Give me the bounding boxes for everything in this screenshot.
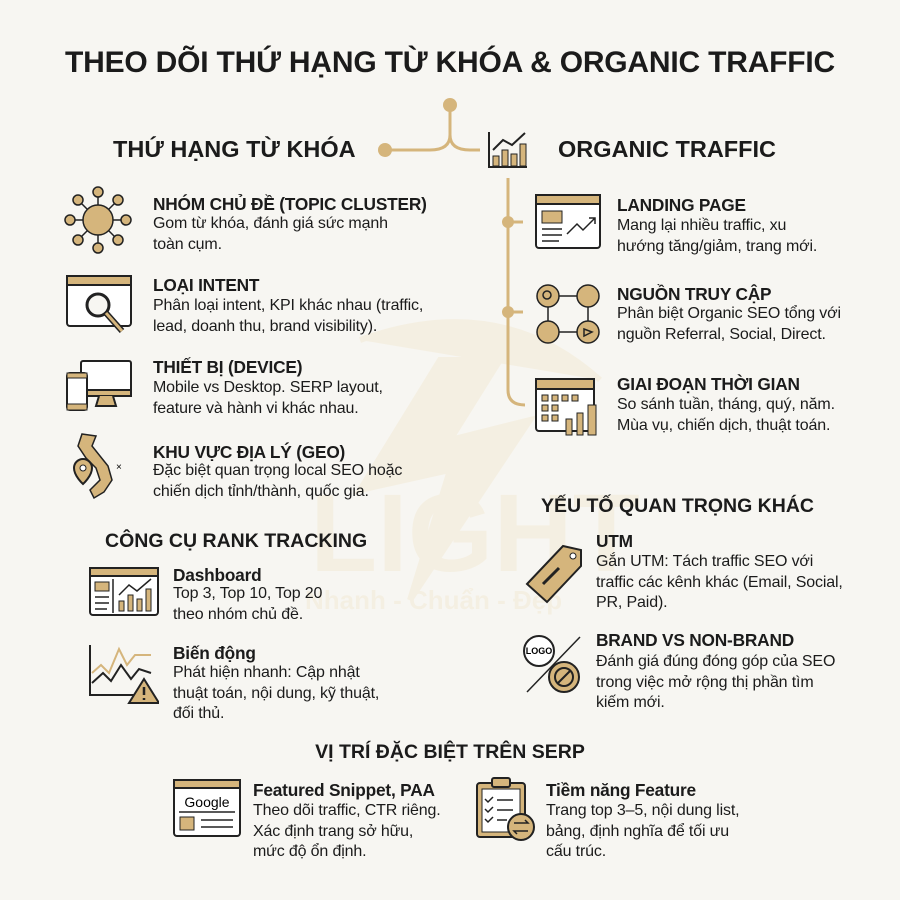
heading: rank tracking tools: CÔNG CỤ RANK TRACKING — [105, 530, 367, 552]
item: time periods: Mùa vụ, chiến dịch, thuật toán. — [617, 417, 830, 434]
item: brand vs non-brand: LOGO — [526, 646, 552, 656]
item: fluctuation: đối thủ. — [173, 705, 224, 722]
item: brand vs non-brand: BRAND VS NON-BRAND — [596, 630, 794, 650]
item: time periods — [535, 374, 835, 436]
watermark — [305, 319, 640, 615]
item: device — [66, 357, 383, 417]
item: UTM — [526, 531, 843, 611]
item: intent — [66, 275, 423, 335]
item: time periods: GIAI ĐOẠN THỜI GIAN — [617, 374, 800, 394]
item: featured snippet: Featured Snippet, PAA — [253, 780, 435, 800]
item: traffic sources: nguồn Referral, Social, Direct. — [617, 326, 826, 343]
heading: keyword ranking: THỨ HẠNG TỪ KHÓA — [113, 136, 356, 162]
item: geo: chiến dịch tỉnh/thành, quốc gia. — [153, 483, 369, 500]
item: topic cluster: Gom từ khóa, đánh giá sức mạnh — [153, 215, 388, 232]
item: geo — [73, 433, 402, 500]
item: featured snippet: mức độ ổn định. — [253, 843, 366, 860]
item: intent: LOẠI INTENT — [153, 275, 259, 295]
connector — [378, 98, 525, 406]
item: traffic sources: NGUỒN TRUY CẬP — [617, 284, 771, 304]
item: dashboard: theo nhóm chủ đề. — [173, 606, 303, 623]
item: feature potential: bảng, định nghĩa để tối ưu — [546, 823, 729, 840]
item: UTM: Gắn UTM: Tách traffic SEO với — [596, 553, 813, 570]
item: time periods: So sánh tuần, tháng, quý, năm. — [617, 396, 835, 413]
item: topic cluster: NHÓM CHỦ ĐỀ (TOPIC CLUSTER) — [153, 194, 427, 214]
item: landing page — [535, 194, 817, 255]
item: fluctuation: Phát hiện nhanh: Cập nhật — [173, 664, 360, 681]
item: geo: KHU VỰC ĐỊA LÝ (GEO) — [153, 442, 345, 462]
item: dashboard: Top 3, Top 10, Top 20 — [173, 585, 322, 602]
item: brand vs non-brand — [523, 630, 835, 711]
item: fluctuation: Biến động — [173, 643, 256, 663]
item: landing page: Mang lại nhiều traffic, xu — [617, 217, 786, 234]
item: featured snippet: Google — [184, 794, 230, 810]
item: intent: lead, doanh thu, brand visibility). — [153, 318, 377, 335]
item: fluctuation — [89, 643, 379, 722]
item: feature potential: Trang top 3–5, nội dung list, — [546, 802, 739, 819]
item: brand vs non-brand: trong việc mở rộng thị phần tìm — [596, 674, 814, 691]
heading: other factors: YẾU TỐ QUAN TRỌNG KHÁC — [541, 495, 814, 517]
watermark: LIGHT — [310, 472, 640, 595]
item: feature potential: cấu trúc. — [546, 843, 606, 860]
item: traffic sources: Phân biệt Organic SEO tổng với — [617, 305, 841, 322]
item: UTM: PR, Paid). — [596, 594, 667, 611]
item: featured snippet: Theo dõi traffic, CTR riêng. — [253, 802, 441, 819]
item: landing page: hướng tăng/giảm, trang mới. — [617, 238, 817, 255]
item: device: feature và hành vi khác nhau. — [153, 400, 359, 417]
item: dashboard — [89, 565, 322, 623]
heading: organic traffic: ORGANIC TRAFFIC — [558, 136, 776, 162]
item: brand vs non-brand: kiếm mới. — [596, 694, 665, 711]
item: feature potential: Tiềm năng Feature — [546, 780, 696, 800]
item: landing page: LANDING PAGE — [617, 195, 746, 215]
item: topic cluster — [64, 186, 427, 254]
item: dashboard: Dashboard — [173, 565, 261, 585]
item: topic cluster: toàn cụm. — [153, 236, 222, 253]
item: traffic sources — [536, 284, 841, 344]
item: UTM: traffic các kênh khác (Email, Social, — [596, 574, 843, 591]
item: device: Mobile vs Desktop. SERP layout, — [153, 379, 383, 396]
icon: chart — [488, 132, 527, 168]
item: fluctuation: thuật toán, nội dung, kỹ thuật, — [173, 685, 379, 702]
item: device: THIẾT BỊ (DEVICE) — [153, 357, 302, 377]
item: intent: Phân loại intent, KPI khác nhau (traffic, — [153, 297, 423, 314]
item: featured snippet — [173, 779, 441, 860]
watermark: Nhanh - Chuẩn - Đẹp — [305, 585, 562, 615]
item: brand vs non-brand: Đánh giá đúng đóng góp của SEO — [596, 653, 835, 670]
item: featured snippet: Xác định trang sở hữu, — [253, 823, 413, 840]
title: THEO DÕI THỨ HẠNG TỪ KHÓA & ORGANIC TRAFFIC — [65, 46, 835, 79]
item: geo: × — [116, 462, 122, 473]
item: UTM: UTM — [596, 531, 633, 551]
heading: SERP features: VỊ TRÍ ĐẶC BIỆT TRÊN SERP — [315, 741, 585, 763]
item: feature potential — [476, 777, 739, 860]
item: geo: Đặc biệt quan trọng local SEO hoặc — [153, 462, 402, 479]
